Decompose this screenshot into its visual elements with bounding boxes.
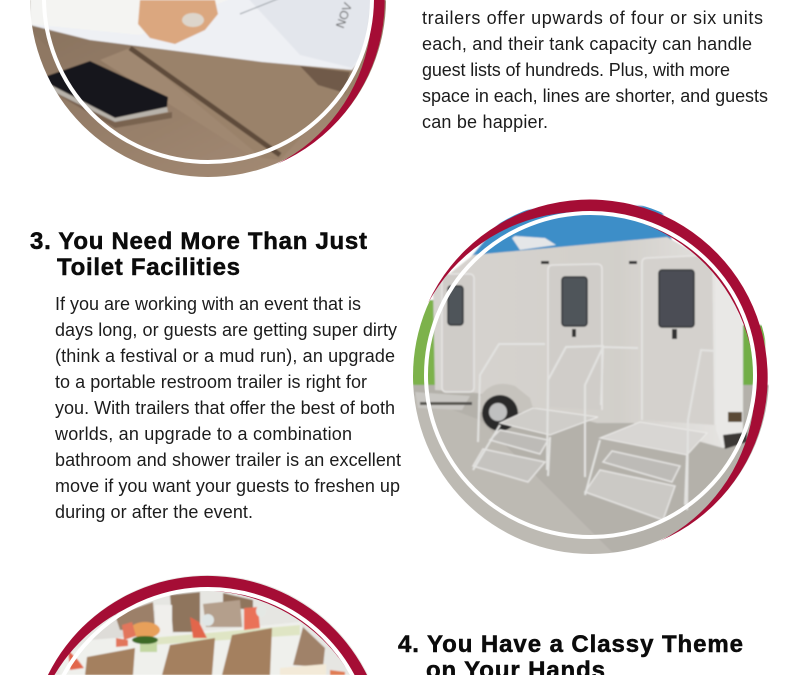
text block: trailers capacity: trailers offer upwards of four or six units bbox=[422, 8, 763, 28]
text block: section 3 body: days long, or guests are getting super dirty bbox=[55, 320, 397, 340]
heading: section 4: 4. You Have a Classy Theme bbox=[398, 631, 743, 658]
text block: trailers capacity bbox=[422, 8, 768, 132]
photo circle: classy banquet table setting bbox=[48, 575, 368, 675]
text block: section 3 body: bathroom and shower trailer is an excellent bbox=[55, 450, 401, 470]
text block: section 3 body: (think a festival or a mud run), an upgrade bbox=[55, 346, 395, 366]
photo circle: event planner at a wooden table: NOV bbox=[333, 1, 355, 30]
photo circle: restroom trailer with steps bbox=[410, 195, 770, 560]
maroon crescent bbox=[45, 0, 385, 164]
text block: section 3 body bbox=[54, 294, 401, 522]
text block: section 3 body: you. With trailers that offer the best of both bbox=[55, 398, 395, 418]
photo circle: event planner at a wooden table bbox=[30, 0, 386, 177]
wheel bbox=[478, 384, 534, 412]
text block: section 3 body: to a portable restroom trailer is right for bbox=[55, 372, 367, 392]
text block: trailers capacity: each, and their tank capacity can handle bbox=[422, 34, 752, 54]
maroon crescent bbox=[29, 576, 385, 675]
white ring bbox=[426, 213, 755, 537]
heading: section 3: 3. You Need More Than Just bbox=[30, 228, 367, 255]
text block: trailers capacity: guest lists of hundreds. Plus, with more bbox=[422, 60, 730, 80]
heading: section 4 bbox=[398, 631, 743, 675]
text block: trailers capacity: can be happier. bbox=[422, 112, 548, 132]
text block: section 3 body: worlds, an upgrade to a combination bbox=[54, 424, 352, 444]
heading: section 3: Toilet Facilities bbox=[57, 254, 240, 281]
windows bbox=[448, 286, 463, 325]
white ring bbox=[44, 0, 372, 162]
maroon crescent bbox=[428, 199, 768, 541]
text block: section 3 body: during or after the event. bbox=[55, 502, 253, 522]
heading: section 3 bbox=[30, 228, 367, 281]
text block: section 3 body: move if you want your guests to freshen up bbox=[55, 476, 400, 496]
doors bbox=[442, 274, 474, 392]
steps bbox=[500, 408, 598, 435]
text block: trailers capacity: space in each, lines are shorter, and guests bbox=[422, 86, 768, 106]
text block: section 3 body: If you are working with an event that is bbox=[55, 294, 361, 314]
white ring bbox=[44, 589, 372, 675]
